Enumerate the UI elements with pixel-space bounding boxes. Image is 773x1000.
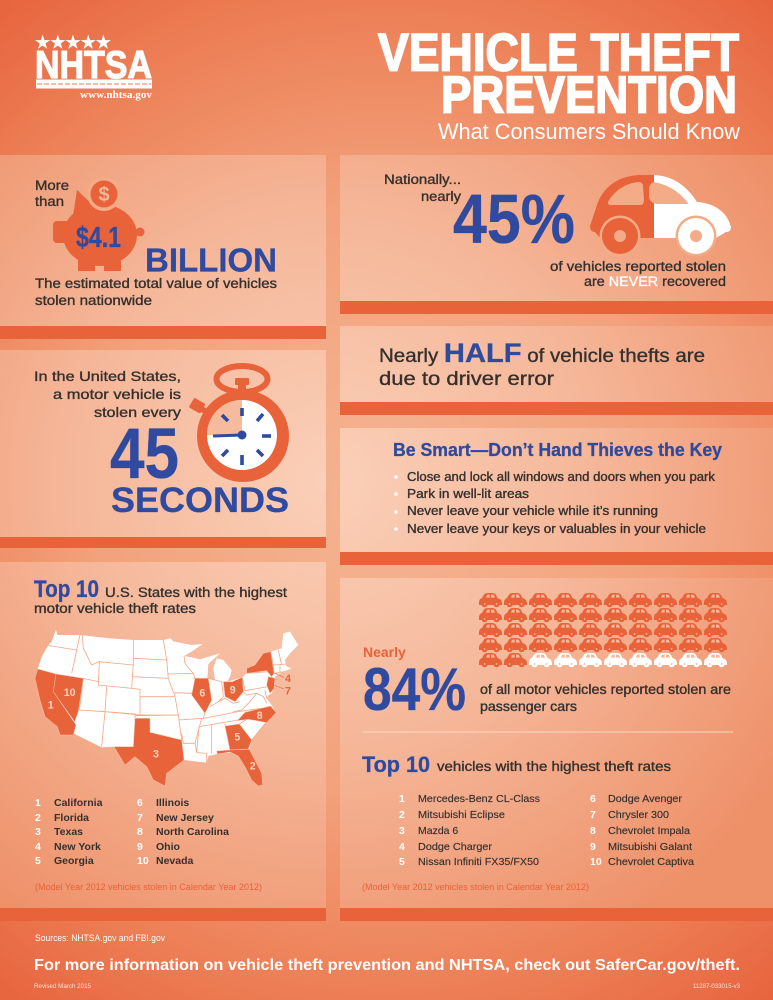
chart: US map: 4 [285, 673, 291, 685]
text: in the united states: stolen every [94, 404, 181, 420]
icon: five stars: ★★★★★ [35, 33, 112, 52]
list: tips: Park in well-lit areas [407, 487, 529, 501]
icon: piggy bank: $ [98, 184, 110, 206]
panel: 84 percent and top 10 vehicles [340, 578, 773, 921]
icon: stopwatch [189, 366, 289, 482]
chart: US map: 10 [64, 687, 76, 699]
logo: NHTSA [35, 33, 153, 101]
list: top vehicles: Mitsubishi Galant [608, 841, 692, 853]
call to action: For more information on vehicle theft prevention and NHTSA, check out SaferCar.gov/theft. [34, 957, 740, 974]
title: PREVENTION [441, 66, 737, 124]
list: top vehicles: Chevrolet Impala [608, 825, 690, 837]
heading: top 10 states: U.S. States with the highest [105, 585, 287, 600]
list: top states: 9 [137, 841, 143, 853]
chart: US map: 9 [230, 684, 236, 696]
text: nationally nearly: nearly [421, 189, 461, 204]
icon: half orange half white car [590, 175, 731, 256]
text: never recovered [550, 259, 726, 289]
panel: be smart tips [340, 428, 773, 565]
logo url: www.nhtsa.gov [80, 89, 153, 101]
panel: $4.1 billion [0, 155, 326, 339]
list: top states: 6 [137, 797, 143, 809]
list: top states: Georgia [54, 855, 94, 867]
chart: US map: 7 [285, 686, 291, 698]
list: top states: 3 [35, 826, 41, 838]
chart: US map [35, 629, 298, 786]
text: never recovered: are NEVER recovered [584, 274, 726, 289]
list: top states: 5 [35, 855, 41, 867]
text: never recovered: of vehicles reported stolen [550, 259, 726, 274]
title [378, 24, 741, 144]
heading: top 10 states: motor vehicle theft rates [34, 601, 196, 616]
list: top vehicles: Nissan Infiniti FX35/FX50 [418, 856, 539, 868]
footnote: (Model Year 2012 vehicles stolen in Calendar Year 2012) [362, 882, 589, 892]
list: top vehicles: 10 [590, 856, 602, 868]
list: top vehicles: Dodge Charger [418, 841, 493, 853]
list: top vehicles: 3 [399, 825, 405, 837]
list: tips [394, 470, 716, 536]
heading: top 10 states: Top 10 [34, 576, 99, 603]
heading: top 10 vehicles: vehicles with the highest theft rates [437, 759, 671, 774]
panel: nearly half [340, 326, 773, 415]
text: in the united states [34, 368, 181, 420]
list: top states [35, 797, 229, 867]
list: top vehicles: 2 [399, 809, 405, 821]
chart: US map: 6 [199, 688, 205, 700]
chart: US map: 8 [257, 710, 263, 722]
panel: top 10 states [0, 562, 326, 921]
icon: piggy bank [53, 177, 144, 271]
list: top vehicles: 7 [590, 809, 596, 821]
list: top vehicles: Mitsubishi Eclipse [418, 809, 505, 821]
list: top vehicles: 1 [399, 793, 405, 805]
list: tips: Never leave your vehicle while it’s running [407, 504, 658, 518]
list: top vehicles [399, 793, 694, 868]
list: top vehicles: Chrysler 300 [608, 809, 669, 821]
list: top states: New Jersey [156, 812, 214, 824]
stat: $4.1: $4.1 [76, 222, 121, 254]
list: top vehicles: Mercedes-Benz CL-Class [418, 793, 540, 805]
stat: 45%: 45% [453, 180, 575, 258]
text: description: stolen nationwide [35, 293, 152, 308]
subtitle: What Consumers Should Know [438, 119, 741, 144]
list: top states: North Carolina [156, 826, 229, 838]
stat: 45: 45 [110, 415, 179, 494]
text: driver error [379, 338, 705, 390]
heading: top 10 vehicles: Top 10 [362, 752, 430, 777]
text: nationally nearly: Nationally... [384, 172, 461, 187]
list: tips: Close and lock all windows and doors when you park [407, 470, 716, 484]
stat: 84%: 84% [363, 656, 466, 723]
sources: Sources: NHTSA.gov and FBI.gov [35, 933, 165, 944]
stat: billion: BILLION [145, 242, 277, 278]
text: passenger cars: of all motor vehicles reported stolen are [480, 682, 731, 697]
chart: US map: 2 [250, 760, 256, 772]
list: top vehicles: 5 [399, 856, 405, 868]
footer [34, 933, 740, 990]
chart: US map: 3 [153, 748, 159, 760]
list: top states: 7 [137, 812, 143, 824]
list: top states: Illinois [156, 797, 189, 809]
chart: US map: 1 [48, 699, 54, 711]
list: top vehicles: 4 [399, 841, 405, 853]
text: driver error: due to driver error [379, 369, 555, 390]
chart: US map: 5 [234, 732, 240, 744]
text: passenger cars [480, 682, 731, 714]
list: top vehicles: 9 [590, 841, 596, 853]
text: nationally nearly [384, 172, 461, 204]
list: top vehicles: Mazda 6 [418, 825, 458, 837]
heading: top 10 states [34, 576, 287, 616]
panel: 45 seconds [0, 350, 326, 548]
text: more than [35, 178, 69, 209]
text: in the united states: a motor vehicle is [53, 386, 181, 402]
list: top vehicles: 8 [590, 825, 596, 837]
panel: 45 percent never recovered [340, 155, 773, 314]
list: top vehicles: Chevrolet Captiva [608, 856, 694, 868]
text: driver error: Nearly HALF of vehicle thefts are [379, 338, 705, 368]
list: top states: Ohio [156, 841, 180, 853]
list: top states: Florida [54, 812, 89, 824]
list: top vehicles: Dodge Avenger [608, 793, 683, 805]
text: passenger cars: passenger cars [480, 699, 577, 714]
chart: car pictogram [479, 593, 727, 667]
list: top states: 10 [137, 855, 149, 867]
stat: seconds: SECONDS [111, 481, 289, 520]
heading: be smart: Be Smart—Don’t Hand Thieves the Key [393, 440, 722, 460]
list: top states: 2 [35, 812, 41, 824]
list: top states: 1 [35, 797, 41, 809]
document number: 11287-033015-v3 [693, 983, 740, 990]
list: top states: Texas [54, 826, 83, 838]
footnote: (Model Year 2012 vehicles stolen in Calendar Year 2012) [35, 882, 262, 892]
revision date: Revised March 2015 [34, 983, 91, 990]
list: tips: Never leave your keys or valuables in your vehicle [407, 522, 706, 536]
text: description [35, 276, 277, 308]
list: top states: Nevada [156, 855, 194, 867]
text: in the united states: In the United States, [34, 368, 181, 384]
list: top states: 4 [35, 841, 41, 853]
list: top states: 8 [137, 826, 143, 838]
text: description: The estimated total value of vehicles [35, 276, 277, 291]
heading: top 10 vehicles [362, 752, 671, 777]
text: nearly: Nearly [363, 644, 406, 660]
logo wordmark: NHTSA [35, 44, 152, 87]
text: more than: More [35, 178, 69, 193]
list: top states: New York [54, 841, 101, 853]
list: top states: California [54, 797, 103, 809]
list: top vehicles: 6 [590, 793, 596, 805]
icon: road stripe [36, 80, 152, 88]
text: more than: than [35, 194, 64, 209]
